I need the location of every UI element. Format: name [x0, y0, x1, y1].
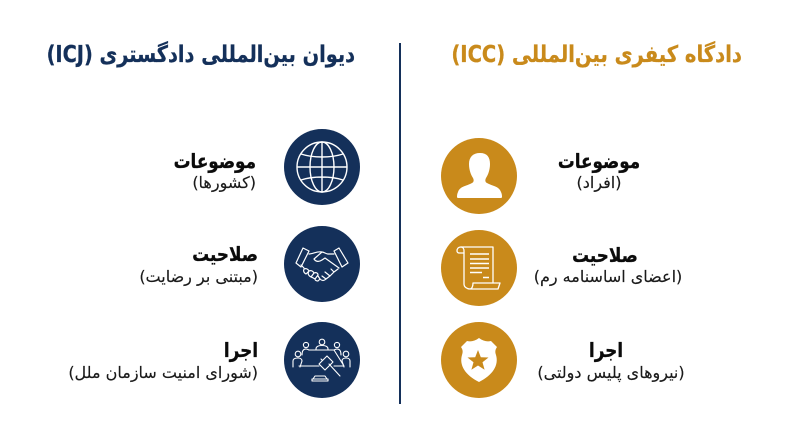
- text: ICC subjects: [558, 149, 640, 192]
- text: ICJ subjects: موضوعات: [174, 149, 256, 173]
- text: ICJ jurisdiction: (مبتنی بر رضایت): [139, 267, 258, 286]
- icon: council table and gavel: [284, 322, 360, 398]
- heading: ICC: دادگاه کیفری بین‌المللی (ICC): [451, 42, 742, 68]
- center divider line: [399, 43, 401, 404]
- text: ICC jurisdiction: (اعضای اساسنامه رم): [534, 267, 682, 286]
- text: ICC enforcement: اجرا: [589, 338, 623, 362]
- text: ICJ enforcement: [68, 338, 258, 382]
- icon: globe: [284, 129, 360, 205]
- icon: scroll: [441, 230, 517, 306]
- text: ICC subjects: موضوعات: [558, 149, 640, 173]
- text: ICJ subjects: [174, 149, 256, 192]
- icon: person: [441, 138, 517, 214]
- text: ICC jurisdiction: [534, 243, 682, 286]
- text: ICC subjects: (افراد): [576, 173, 621, 192]
- text: ICJ jurisdiction: [139, 242, 258, 286]
- text: ICC enforcement: (نیروهای پلیس دولتی): [537, 363, 685, 382]
- heading: ICJ: دیوان بین‌المللی دادگستری (ICJ): [47, 42, 355, 68]
- icon: police badge: [441, 322, 517, 398]
- text: ICJ subjects: (کشورها): [192, 173, 256, 192]
- text: ICC enforcement: [537, 338, 685, 382]
- icon: handshake: [284, 226, 360, 302]
- text: ICJ enforcement: (شورای امنیت سازمان ملل): [68, 363, 258, 382]
- text: ICJ jurisdiction: صلاحیت: [192, 242, 258, 266]
- text: ICJ enforcement: اجرا: [224, 338, 258, 362]
- text: ICC jurisdiction: صلاحیت: [572, 243, 638, 267]
